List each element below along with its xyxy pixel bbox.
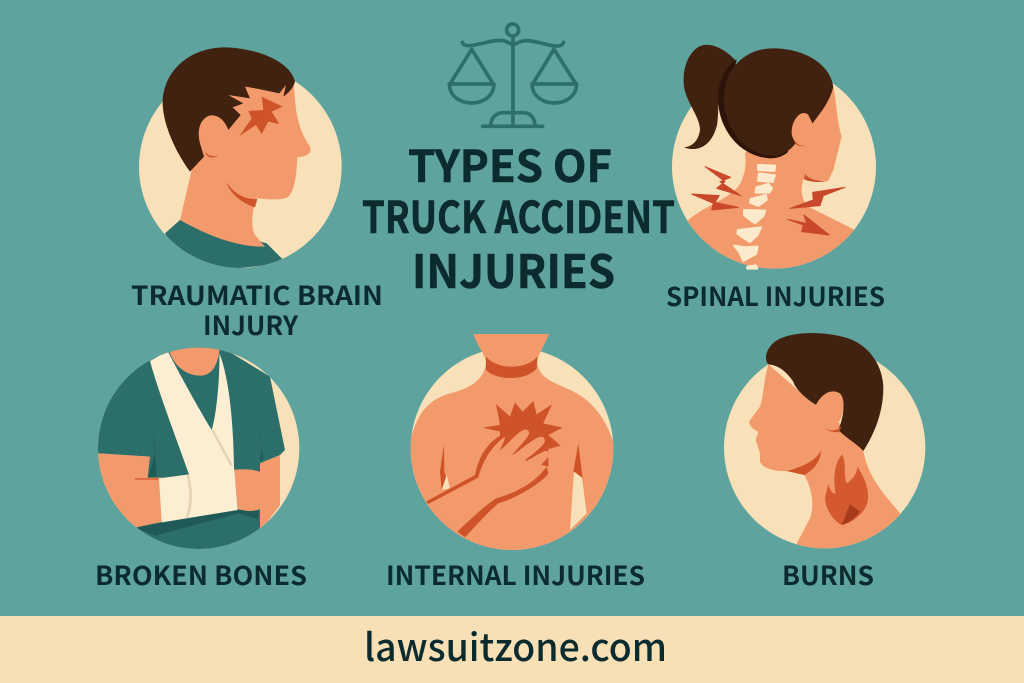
title: TRUCK ACCIDENT [362,182,675,246]
panel: traumatic brain injury [131,47,383,343]
panel: internal injuries [386,334,645,593]
label: TRAUMATIC BRAIN [131,276,383,313]
flame [825,454,868,525]
label: BURNS [782,556,874,593]
pain bolts [692,167,845,235]
illustration: arm in sling [98,348,300,549]
footer band [0,616,1024,683]
label: INTERNAL INJURIES [386,556,645,593]
label: BROKEN BONES [95,556,307,593]
panel: burns [724,333,925,593]
label: SPINAL INJURIES [666,277,885,314]
title [362,131,675,302]
panel: broken bones [97,348,306,586]
illustration: hand on chest [410,334,613,555]
title: INJURIES [412,236,615,302]
illustration: neck burn [724,333,925,555]
label [131,276,383,343]
illustration: neck and spine pain [672,45,876,273]
label: INJURY [203,306,299,343]
panel: spinal injuries [666,45,885,314]
icon: scales of justice [449,24,577,126]
spine vertebrae [734,165,775,269]
illustration: head with forehead injury [139,47,342,273]
title: TYPES OF [408,131,612,195]
website: lawsuitzone.com [364,617,667,672]
